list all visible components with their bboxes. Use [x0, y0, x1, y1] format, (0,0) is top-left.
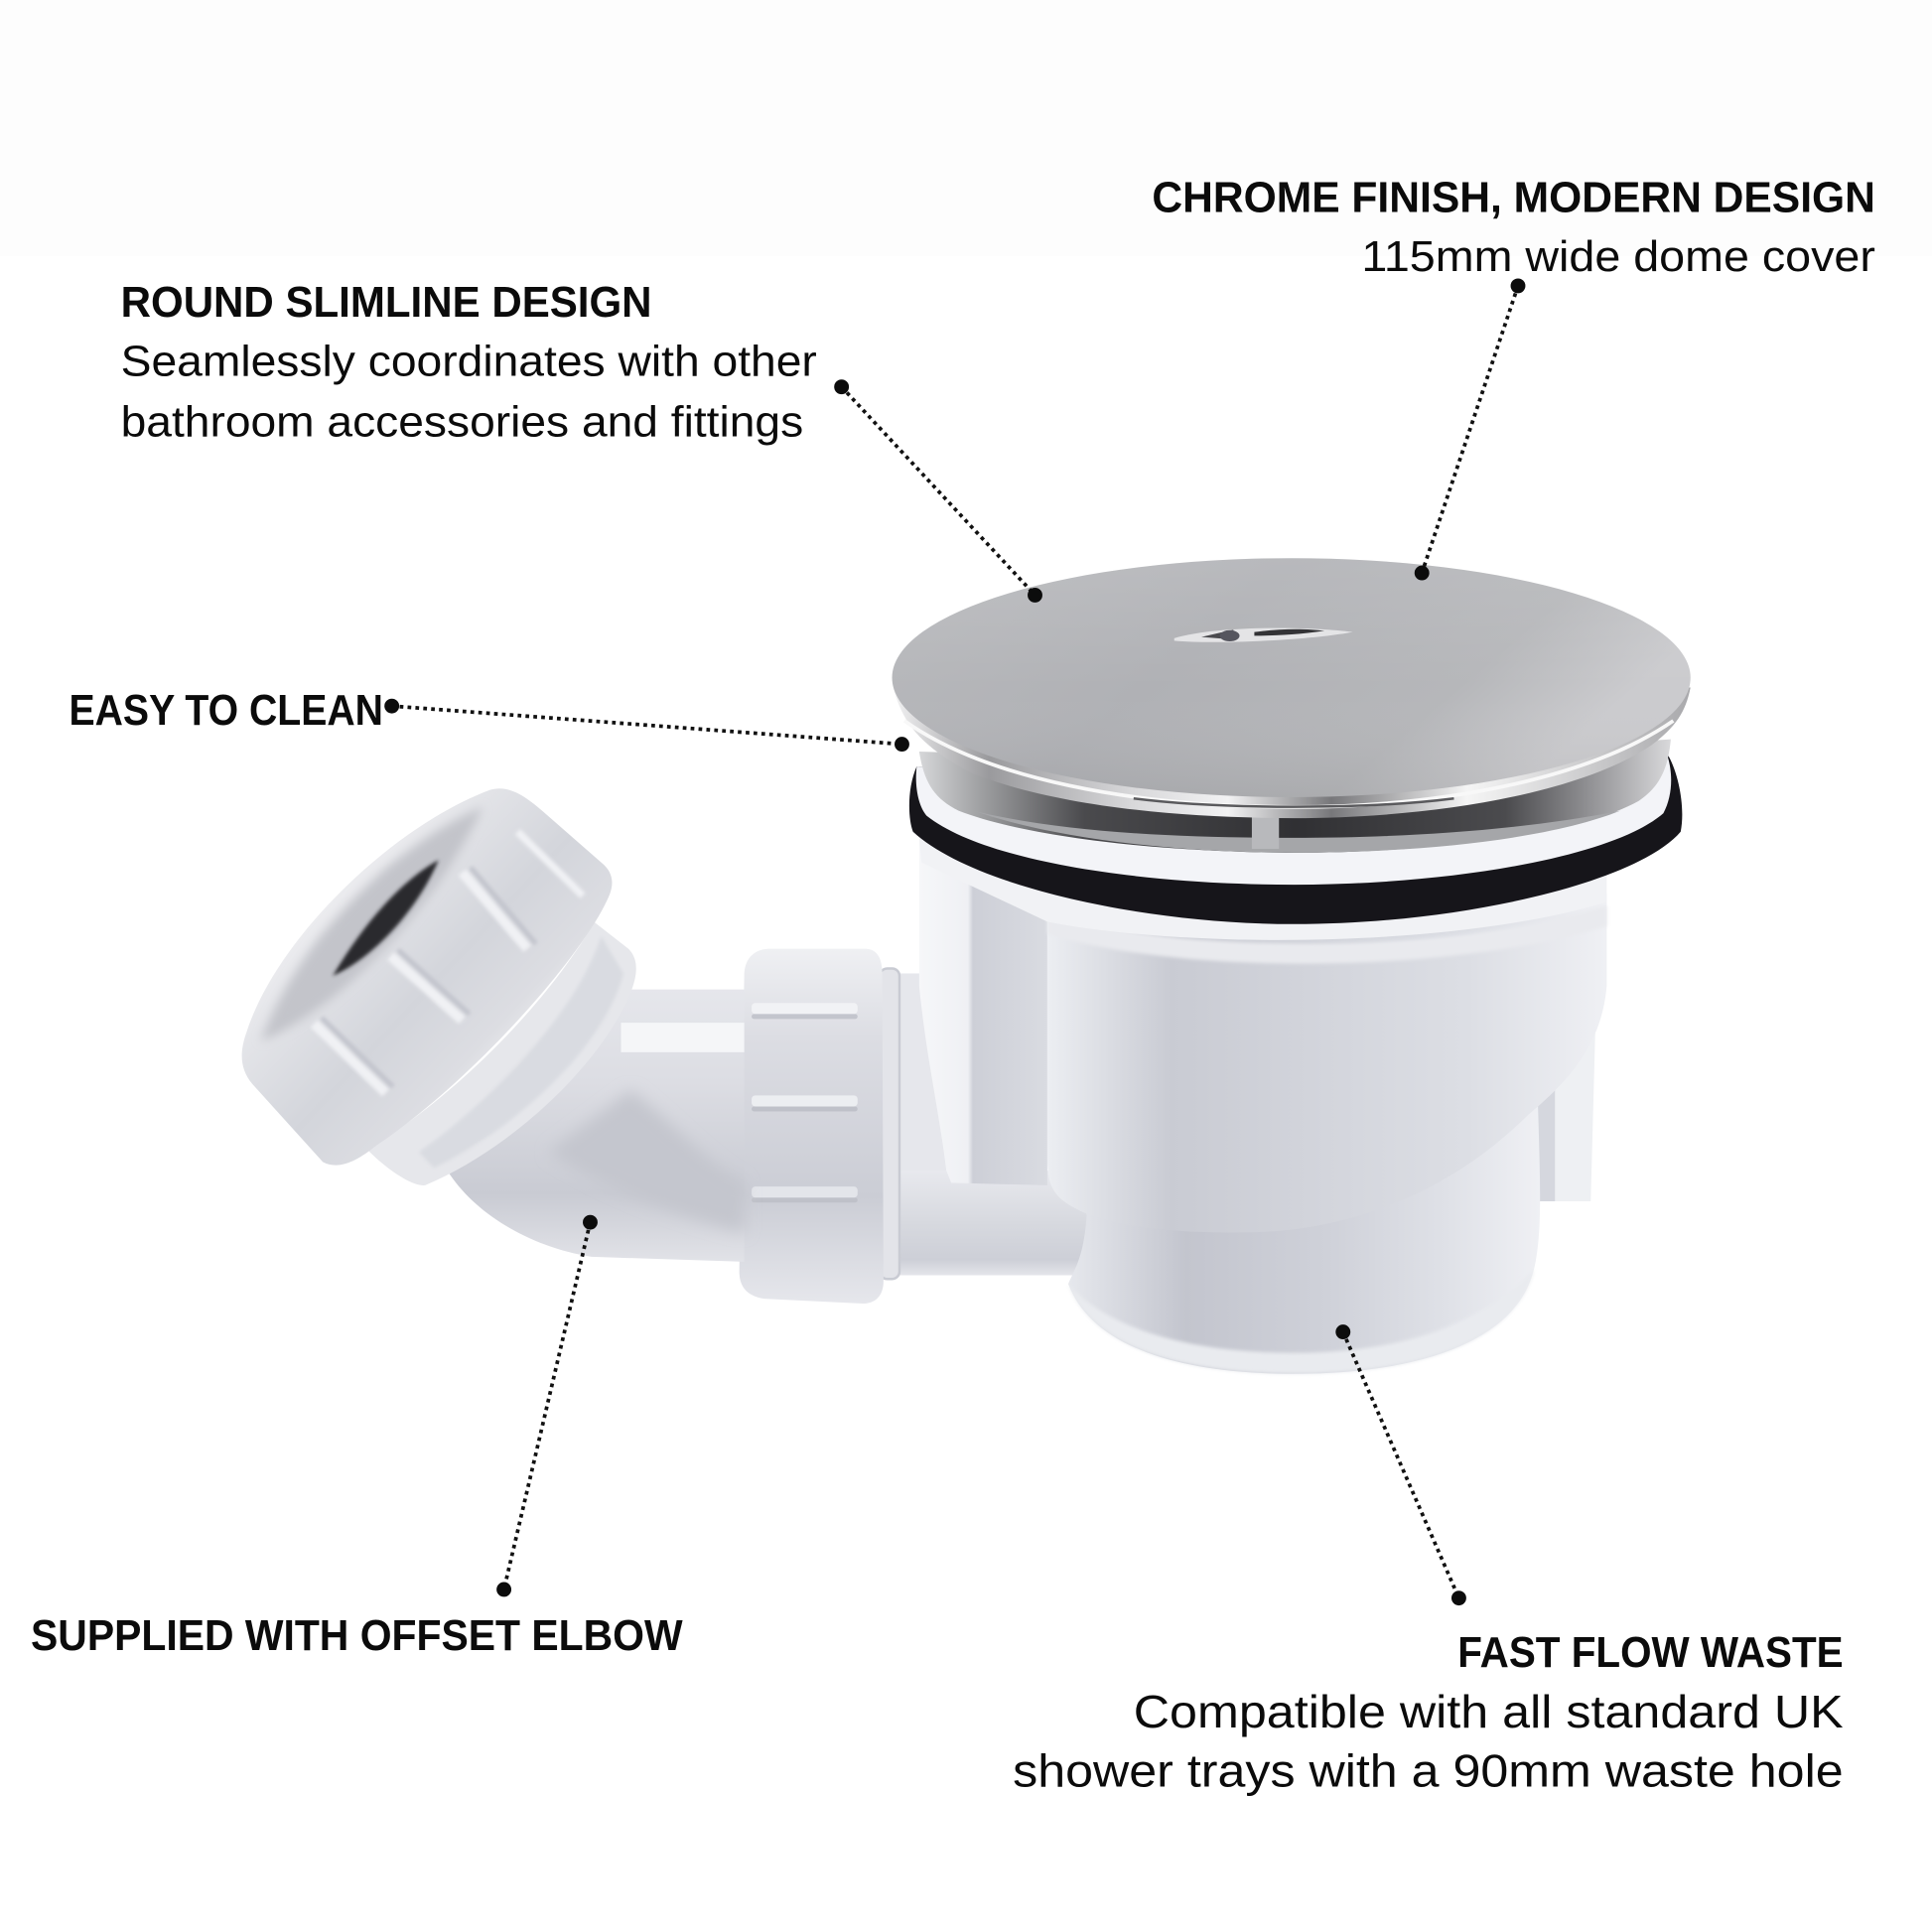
callout leader: fast flow waste — [1335, 1324, 1466, 1605]
horizontal connector pipe — [890, 1171, 1087, 1276]
black sealing ring — [909, 752, 1682, 924]
callout text: easy to clean: EASY TO CLEAN — [69, 687, 383, 735]
white flange ring — [916, 752, 1671, 885]
union nut — [740, 949, 899, 1304]
shower waste product photo — [242, 558, 1691, 1374]
callout text: fast flow waste — [1013, 1629, 1844, 1797]
nut opening — [261, 807, 483, 1041]
offset elbow nut — [242, 788, 612, 1166]
callout text: chrome finish, modern design: CHROME FINISH, MODERN DESIGN — [1152, 174, 1875, 221]
lower tube of the body — [1068, 1097, 1540, 1374]
callout text: fast flow waste: Compatible with all standard UK — [1134, 1686, 1844, 1737]
callout leader: chrome finish — [1415, 278, 1525, 581]
callout text: round slimline design: bathroom accessories and fittings — [121, 398, 803, 446]
callout text: round slimline design: ROUND SLIMLINE DESIGN — [121, 279, 652, 327]
callout leader: round slimline — [834, 379, 1042, 603]
callout text: supplied with offset elbow: SUPPLIED WITH OFFSET ELBOW — [31, 1612, 683, 1660]
callout text: round slimline design — [121, 279, 817, 446]
upper side spigot — [890, 973, 951, 1171]
cover slot with screw — [1174, 628, 1353, 642]
callout text: fast flow waste: FAST FLOW WASTE — [1457, 1629, 1844, 1677]
callout text: chrome finish, modern design — [1152, 174, 1875, 281]
chrome cover rim — [894, 688, 1691, 818]
offset elbow pipe — [448, 973, 745, 1262]
callout text: round slimline design: Seamlessly coordinates with other — [121, 339, 817, 386]
right fin of the body — [1528, 973, 1596, 1201]
top background band — [0, 0, 1932, 256]
grille under the cover — [919, 740, 1671, 853]
body upper collar — [919, 838, 1606, 940]
chrome dome cover face — [893, 558, 1691, 797]
main cup of the body — [1047, 894, 1606, 1232]
callout text: chrome finish, modern design: 115mm wide dome cover — [1361, 233, 1875, 281]
callout leader: offset elbow — [496, 1215, 598, 1596]
nut ribs — [314, 832, 583, 1093]
elbow collar — [367, 905, 636, 1185]
left fin of the body — [919, 840, 1047, 1185]
callout leader: easy to clean — [384, 699, 909, 752]
callout text: fast flow waste: shower trays with a 90mm waste hole — [1013, 1745, 1844, 1797]
